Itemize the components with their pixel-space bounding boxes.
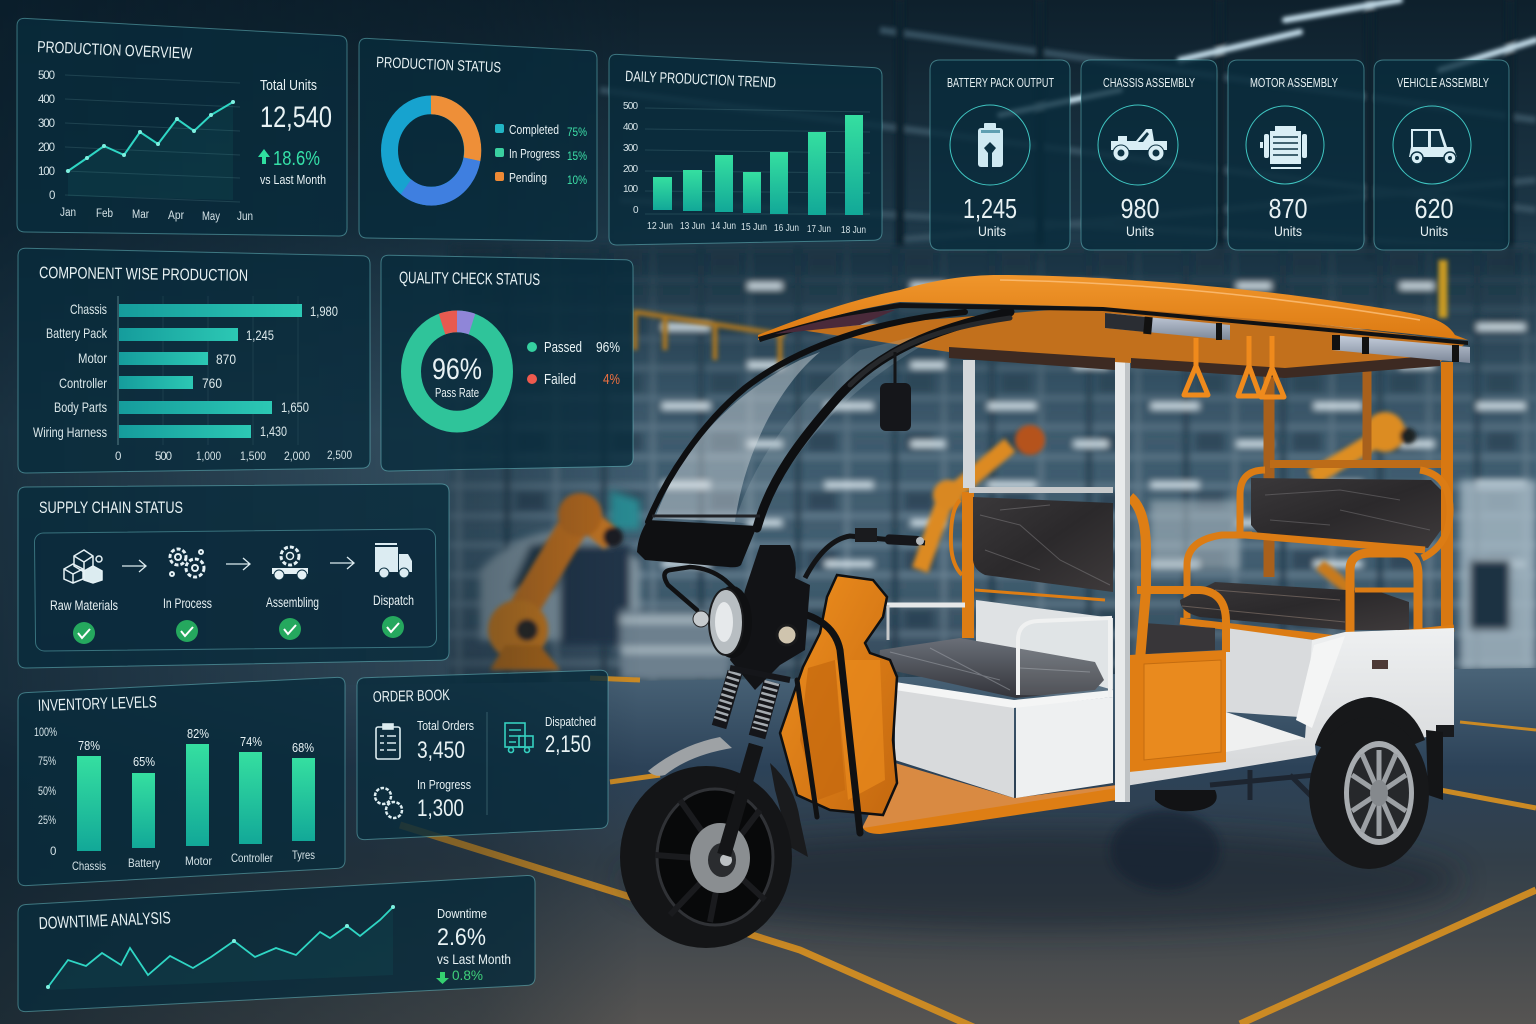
status checks	[73, 616, 404, 644]
stat: dispatched: Dispatched	[545, 715, 596, 729]
bar chart: Motor	[185, 854, 212, 868]
horizontal bar chart: Chassis	[70, 301, 107, 317]
bar chart: 300	[623, 143, 638, 154]
line chart: 500	[38, 70, 55, 82]
right armrest of passenger seat	[1137, 590, 1226, 652]
ceiling structure	[600, 0, 1536, 270]
horizontal bar chart: Wiring Harness	[33, 424, 107, 440]
horizontal bar chart: Body Parts	[54, 399, 107, 415]
horizontal bar chart: 1,500	[240, 451, 266, 463]
rear wheel	[1309, 697, 1443, 869]
handlebar	[805, 536, 925, 578]
line chart: 300	[38, 118, 55, 130]
icon: truck	[375, 544, 412, 578]
bar chart: 65%	[133, 754, 155, 769]
arrow	[122, 560, 146, 572]
rear armrest and base	[1180, 553, 1454, 640]
bar chart: 50%	[38, 786, 56, 798]
bar chart: 500	[623, 101, 638, 112]
downtime stat: vs Last Month	[437, 952, 511, 967]
passenger seat frame	[951, 492, 1105, 638]
bar chart: 75%	[38, 756, 56, 768]
legend: Pending	[509, 170, 547, 185]
downtime stat: 0.8%	[452, 967, 483, 983]
front guard bars	[664, 567, 860, 833]
heading: INVENTORY LEVELS	[38, 693, 157, 715]
bar chart: Battery	[128, 856, 160, 870]
horizontal bar chart: 1,650	[281, 399, 309, 415]
bar chart: 78%	[78, 738, 100, 753]
bar chart: 0	[50, 846, 56, 858]
panel: order book	[357, 670, 608, 840]
heading: COMPONENT WISE PRODUCTION	[39, 264, 248, 285]
horizontal bar chart: 500	[155, 451, 172, 463]
panel: battery pack output: 1,245	[963, 193, 1017, 224]
bar chart: 14 Jun	[711, 221, 736, 232]
panel: motor assembly: 870	[1268, 193, 1308, 224]
front seat cushion	[880, 638, 1104, 698]
arrow	[226, 558, 250, 570]
top bar of backrest	[969, 487, 1113, 493]
canopy underside	[800, 306, 1468, 375]
shadow	[620, 830, 1460, 930]
rear white body	[1226, 628, 1314, 718]
panel: supply chain status	[18, 484, 449, 668]
legend: Completed	[509, 122, 559, 137]
panel: inventory levels	[18, 677, 345, 886]
stat: in progress: In Progress	[417, 778, 471, 792]
line chart: Mar	[132, 209, 149, 221]
downtime stat: Downtime	[437, 906, 487, 921]
bar chart: Tyres	[292, 848, 315, 862]
horizontal bar chart	[33, 296, 352, 463]
stat: dispatched	[545, 715, 596, 758]
legend: 10%	[567, 173, 587, 187]
panel: chassis assembly	[1081, 60, 1217, 250]
legend: 4%	[603, 371, 620, 388]
line chart: Jan	[60, 207, 76, 219]
legend: Passed	[544, 339, 582, 356]
horizontal bar chart: 1,430	[260, 423, 287, 439]
legend: 15%	[567, 149, 587, 163]
platform floor	[862, 763, 1117, 833]
legend: 96%	[596, 339, 620, 356]
heading: QUALITY CHECK STATUS	[399, 269, 540, 289]
panel: chassis assembly: 980	[1120, 193, 1160, 224]
stat: dispatched: 2,150	[545, 731, 591, 758]
line chart: Jun	[237, 211, 253, 223]
stat: total orders	[417, 719, 474, 764]
total units stat: vs Last Month	[260, 173, 326, 187]
line chart: May	[202, 211, 220, 223]
fork and shock absorbers	[719, 668, 790, 855]
panel: vehicle assembly: Units	[1420, 223, 1448, 239]
panel: battery pack output: BATTERY PACK OUTPUT	[947, 75, 1054, 90]
horizontal bar chart: 0	[115, 451, 121, 463]
gauge value: Pass Rate	[435, 386, 479, 400]
bar chart	[34, 726, 315, 873]
icon: gears	[170, 549, 204, 577]
panel: vehicle assembly	[1374, 60, 1509, 250]
bar chart: 100%	[34, 727, 57, 739]
line chart: 0	[49, 190, 55, 202]
stage labels: Assembling	[266, 595, 319, 610]
heading: PRODUCTION STATUS	[376, 54, 501, 76]
rear seat rails	[1187, 470, 1450, 618]
panel: motor assembly: Units	[1274, 223, 1302, 239]
icon: motor	[1260, 126, 1307, 169]
panel: battery pack output: Units	[978, 223, 1006, 239]
racks and production lines	[450, 245, 1536, 690]
total units stat: 18.6%	[273, 148, 320, 170]
icon: chassis	[1111, 129, 1167, 161]
icon: gears	[375, 788, 402, 818]
icon: raw materials	[64, 550, 102, 583]
white main pillar	[1115, 332, 1130, 802]
panel: vehicle assembly: 620	[1414, 193, 1454, 224]
bar chart	[623, 101, 870, 236]
front wheel	[620, 737, 808, 948]
windshield base panel	[637, 520, 757, 567]
downtime stat: 2.6%	[437, 924, 486, 951]
overhead orange gantry	[635, 260, 1443, 365]
gauge value: 96%	[432, 353, 482, 386]
windshield frame	[648, 312, 1010, 528]
icon: battery	[978, 123, 1003, 167]
legend: 75%	[567, 125, 587, 139]
donut gauge	[411, 321, 503, 422]
line chart	[38, 70, 253, 223]
bar chart: 12 Jun	[647, 221, 673, 232]
windshield glass	[655, 352, 820, 522]
heading: DOWNTIME ANALYSIS	[38, 908, 171, 933]
panel: downtime analysis	[18, 875, 535, 1012]
icon: assembling	[272, 547, 308, 580]
line chart: 200	[38, 142, 55, 154]
horizontal bar chart: Controller	[59, 375, 107, 391]
bar chart: 400	[623, 122, 638, 133]
legend: Failed	[544, 371, 576, 388]
horizontal bar chart: 2,000	[284, 451, 310, 463]
bar chart: Chassis	[72, 859, 106, 873]
rear backrest	[1251, 478, 1441, 548]
downtime stat	[436, 906, 511, 984]
horizontal bar chart: 1,980	[310, 303, 338, 319]
bar chart: 100	[623, 184, 638, 195]
robot arm left	[488, 493, 623, 670]
bar chart: 68%	[292, 740, 314, 755]
heading: ORDER BOOK	[373, 687, 451, 706]
legend: In Progress	[509, 146, 560, 161]
stat: in progress: 1,300	[417, 795, 464, 822]
horizontal bar chart: 1,000	[196, 451, 221, 463]
total units stat: Total Units	[260, 78, 317, 94]
white armrest	[1018, 618, 1110, 697]
thin white pillar	[963, 360, 975, 488]
stage labels: Dispatch	[373, 593, 414, 608]
horizontal bar chart: 2,500	[327, 450, 352, 462]
floor	[0, 668, 1536, 1024]
panel: production status	[359, 38, 597, 241]
total units stat: 12,540	[260, 101, 332, 134]
headlamp housing	[730, 545, 810, 690]
bar chart: 15 Jun	[741, 222, 767, 233]
rear seat cushion	[1180, 582, 1409, 630]
far wheel	[1155, 790, 1217, 811]
panel: quality check status	[381, 255, 633, 471]
passenger backrest	[973, 497, 1113, 592]
bar chart: Controller	[231, 851, 273, 865]
total units stat	[258, 78, 332, 187]
grey roof cylinders	[1105, 313, 1470, 363]
stat: in progress	[417, 778, 471, 822]
panel: daily production trend	[609, 54, 882, 245]
panel: chassis assembly: CHASSIS ASSEMBLY	[1103, 75, 1195, 90]
panel: motor assembly	[1228, 60, 1364, 250]
icon: clipboard	[376, 724, 400, 759]
bar chart: 25%	[38, 815, 56, 827]
horizontal bar chart: 1,245	[246, 327, 274, 343]
line chart: Apr	[168, 210, 184, 222]
legend	[495, 122, 587, 187]
horizontal bar chart: 760	[202, 375, 222, 391]
horizontal bar chart: Battery Pack	[46, 325, 108, 341]
legend	[527, 339, 620, 388]
rear frame posts	[1269, 362, 1447, 630]
vehicles on line behind	[480, 480, 1536, 680]
panel: motor assembly: MOTOR ASSEMBLY	[1250, 75, 1338, 90]
panel: component wise production	[18, 248, 370, 473]
stat: total orders: 3,450	[417, 737, 465, 764]
bar chart: 82%	[187, 726, 209, 741]
bar chart: 13 Jun	[680, 221, 705, 232]
bar chart: 17 Jun	[807, 224, 831, 235]
robot arms right	[920, 412, 1416, 590]
bar chart: 16 Jun	[774, 223, 799, 234]
heading: PRODUCTION OVERVIEW	[37, 39, 193, 63]
bar chart: 74%	[240, 734, 262, 749]
e-rickshaw vehicle	[620, 275, 1470, 948]
panel: battery pack output	[930, 60, 1070, 250]
heading: SUPPLY CHAIN STATUS	[39, 499, 183, 517]
stage labels	[50, 593, 414, 613]
stage labels: Raw Materials	[50, 598, 118, 613]
stat: total orders: Total Orders	[417, 719, 474, 733]
bar chart: 200	[623, 164, 638, 175]
bar chart: 18 Jun	[841, 225, 866, 236]
line chart: 100	[38, 166, 55, 178]
front fairing	[780, 575, 897, 815]
panel: chassis assembly: Units	[1126, 223, 1154, 239]
roof	[758, 275, 1468, 340]
horizontal bar chart: 870	[216, 351, 236, 367]
line chart	[46, 905, 395, 990]
seat box panels	[976, 600, 1113, 690]
line chart: 400	[38, 94, 55, 106]
panel: production overview	[17, 18, 347, 236]
icon: clipboard monitor	[505, 723, 533, 752]
donut chart	[390, 105, 473, 196]
bar chart: 0	[633, 205, 639, 216]
horizontal bar chart: Motor	[78, 350, 107, 366]
small seat behind door	[1144, 623, 1215, 654]
gauge value	[432, 353, 482, 400]
icon: rickshaw	[1409, 129, 1457, 164]
grab handles	[1184, 336, 1284, 397]
line chart: Feb	[96, 208, 113, 220]
arrow	[330, 557, 354, 569]
stage labels: In Process	[163, 596, 212, 611]
heading: DAILY PRODUCTION TREND	[625, 68, 777, 92]
orange passenger door	[1129, 650, 1226, 772]
mirror	[894, 352, 896, 385]
panel: vehicle assembly: VEHICLE ASSEMBLY	[1397, 75, 1489, 90]
